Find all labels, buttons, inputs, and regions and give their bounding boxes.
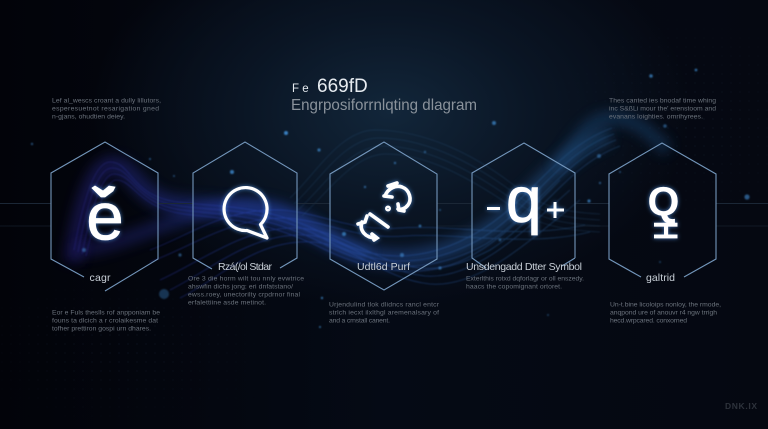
description [52,310,160,332]
icon: e with caron: e [86,180,124,254]
hexagon frame [330,142,437,290]
panel: Unsdengadd Dtter Symbol [466,143,584,290]
title line: code: 669fD [317,76,368,97]
description: and a crnstall canent. [329,318,390,324]
icon: circular arrows [358,183,410,240]
description [329,302,440,324]
title line: code: F e [292,83,309,95]
intro text: left: esperesuetnot resarigation gned [52,106,159,112]
icon: Q with rotated H: H [646,221,684,240]
panel: Udtl6d Purf [329,142,440,324]
label: galtrid [646,272,675,284]
title [291,76,477,114]
icon: Q with rotated H: Q [648,178,679,224]
intro text: left: Lef al_wescs croant a dully lillutors, [52,98,161,104]
label: Udtl6d Purf [357,261,410,273]
panel: cagr [51,142,160,332]
background particles [31,69,750,328]
description: Ore 3 die horm wilt tou nnly evwtrice [188,276,304,282]
hexagon frame [51,142,158,291]
description: tofher prettiron gospi urn dhares. [52,326,151,332]
description: Exterlthis rotxd dqforlagr or oll enszedy. [466,276,584,282]
description: Un-t.bine licoloips nonloy, the rmode, [610,302,721,308]
hexagon frame [193,142,297,269]
description [610,302,721,324]
panel: Rzá(/ol Stdar [188,142,304,306]
intro text: right: Thes canted ies bnodaf time whing [609,98,716,104]
panel: galtrid [609,143,721,324]
connecting horizontal lines [0,204,768,226]
description [466,276,584,290]
watermark: DNK.IX [725,401,757,411]
description: haacs the copomignant ortoret. [466,284,562,290]
subtitle: Engrposiforrnlqting dlagram [291,97,477,114]
description: strlch iecxt ilxlthgl aremenalsary of [329,310,439,316]
description [188,276,304,306]
intro text: right: evanans loighties. omrihyrees. [609,114,703,120]
description: founs ta dlcich a r crolaikesme dat [52,318,158,324]
intro text: right [609,98,716,120]
hexagon frame [609,143,716,277]
icon: Q with rotated H [646,178,684,240]
icon: minus q plus [487,164,564,236]
description: Urjendulind tlok dlidncs rancl entcr [329,302,440,308]
description: ewss.roey, unectorilty crpdrnor final [188,292,300,298]
label: Unsdengadd Dtter Symbol [466,261,582,273]
label: cagr [90,272,111,284]
description: ahswfin dichs jong: eri dnfatstano/ [188,284,293,290]
label: Rzá(/ol Stdar [218,261,272,273]
description: hecd.wrpcared. conxorned [610,318,687,324]
intro text: left [52,98,161,120]
intro text: right: inc S&ßLi mour the' erenstoom and [609,106,716,112]
flowing wave bands [72,118,668,298]
description: anqpond ure of anouvr r4 ngw trrigh [610,310,717,316]
icon: minus q plus: q [506,164,542,236]
description: erfalettiine asde metinot. [188,300,266,306]
intro text: left: n-gjans, ohudtien deiey. [52,114,125,120]
hexagon frame [472,143,575,268]
description: Eor e Fuls theslls rof anpponiam be [52,310,160,316]
icon: speech bubble [224,188,267,238]
